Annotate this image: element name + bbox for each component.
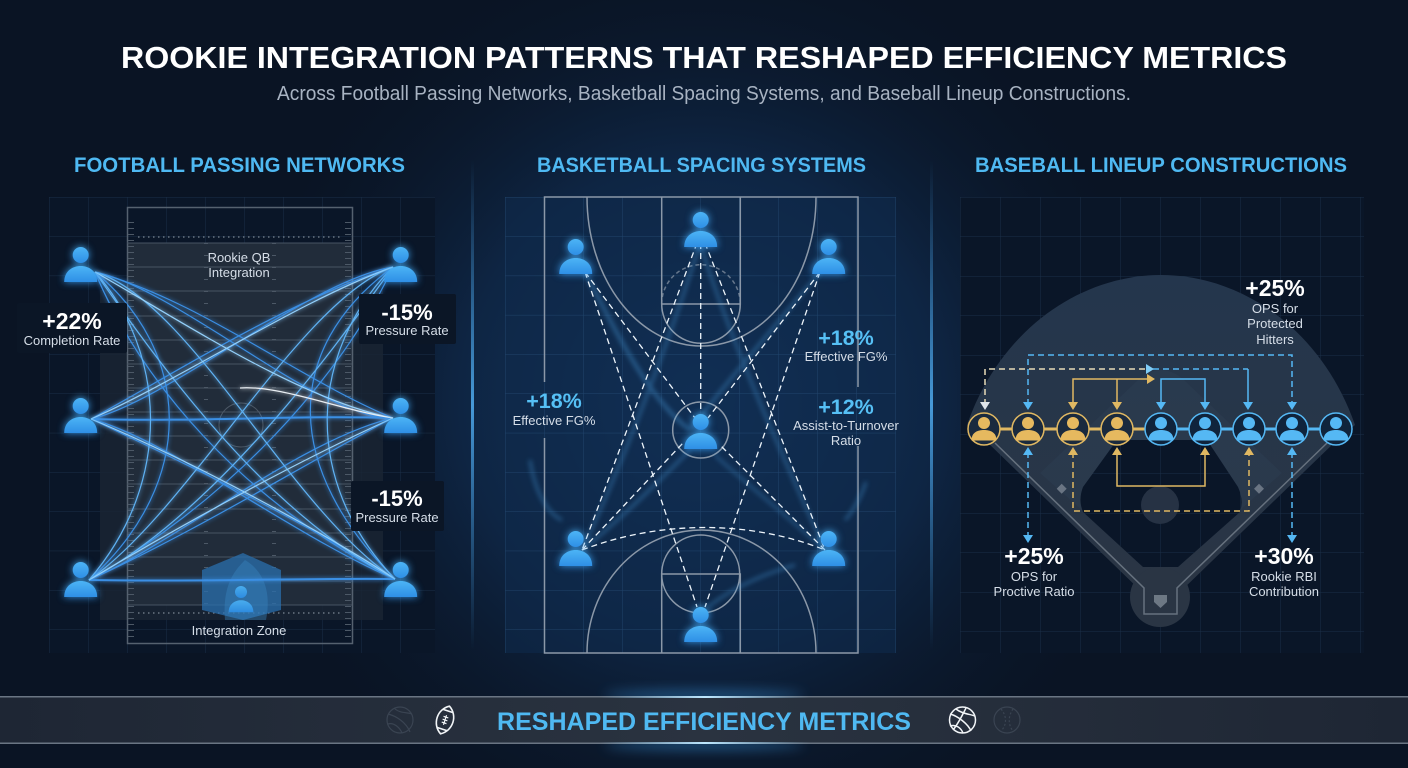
stat: assist to turnover: Ratio: [831, 433, 861, 448]
label: rookie QB integration: Rookie QB: [208, 250, 270, 265]
stat: OPS protected hitters: +25%: [1245, 275, 1305, 301]
panel background grid: [960, 197, 1364, 653]
panel: basketball spacing systems: [505, 154, 900, 653]
stat: OPS proctive ratio: Proctive Ratio: [994, 584, 1074, 599]
icon: basketball: [950, 707, 976, 733]
stat: OPS protected hitters: OPS for: [1252, 301, 1299, 316]
players: football: [64, 247, 417, 597]
stat: OPS protected hitters: Protected: [1247, 316, 1303, 331]
stat: effective FG right: Effective FG%: [805, 349, 888, 364]
label: rookie QB integration: Integration: [208, 265, 270, 280]
panel background grid: [505, 197, 896, 653]
glow streaks: [530, 243, 866, 607]
football field: [100, 208, 383, 644]
connector line: [984, 428, 1336, 430]
title: ROOKIE INTEGRATION PATTERNS THAT RESHAPED EFFICIENCY METRICS: [121, 40, 1287, 75]
stat: rookie RBI contribution: Rookie RBI: [1251, 569, 1317, 584]
heading: baseball: BASEBALL LINEUP CONSTRUCTIONS: [975, 154, 1347, 177]
heading: football: FOOTBALL PASSING NETWORKS: [74, 154, 405, 177]
callout: pressure rate upper: -15%: [381, 300, 433, 325]
arrowheads: [980, 364, 1297, 543]
stat: assist to turnover: [793, 395, 900, 448]
label: rookie QB integration: [208, 250, 270, 280]
stat: rookie RBI contribution: [1249, 543, 1319, 599]
icon: faint baseball right: [994, 707, 1020, 733]
stat: OPS protected hitters: Hitters: [1256, 332, 1294, 347]
callout: completion rate: Completion Rate: [24, 333, 120, 348]
stat: assist to turnover: +12%: [818, 395, 874, 419]
heading: basketball: BASKETBALL SPACING SYSTEMS: [537, 154, 866, 177]
lineup nodes: gold: [968, 413, 1133, 445]
stat: OPS proctive ratio: +25%: [1004, 543, 1064, 569]
stat: effective FG right: [805, 326, 888, 364]
stat: effective FG right: +18%: [818, 326, 874, 350]
stat: OPS proctive ratio: [994, 543, 1074, 599]
basketball court: [544, 197, 858, 653]
icon: faint basketball left: [387, 707, 413, 733]
banner text: RESHAPED EFFICIENCY METRICS: [497, 708, 911, 736]
lineup nodes: blue: [1145, 413, 1352, 445]
stat: effective FG left: [513, 389, 596, 428]
callout: completion rate: +22%: [42, 308, 102, 334]
label: integration zone: Integration Zone: [192, 623, 286, 638]
divider right: [930, 160, 933, 650]
callout: pressure rate upper: [359, 294, 456, 344]
callout: pressure rate lower: -15%: [371, 486, 423, 511]
stat: rookie RBI contribution: Contribution: [1249, 584, 1319, 599]
callout: pressure rate lower: [351, 481, 444, 531]
stat: OPS protected hitters: [1245, 275, 1305, 347]
panel background grid: [49, 197, 435, 653]
panel: baseball lineup constructions: [960, 154, 1364, 653]
callout: completion rate: [17, 303, 127, 353]
stat: OPS proctive ratio: OPS for: [1011, 569, 1058, 584]
stat: rookie RBI contribution: +30%: [1254, 543, 1314, 569]
divider left: [471, 160, 474, 650]
stat: assist to turnover: Assist-to-Turnover: [793, 418, 900, 433]
players: basketball: [559, 212, 845, 642]
integration zone shape: [202, 553, 281, 620]
dashed passing routes: [582, 243, 825, 607]
baseball field: [967, 275, 1355, 627]
stat: effective FG left: +18%: [526, 389, 582, 413]
subtitle: Across Football Passing Networks, Basketball Spacing Systems, and Baseball Lineup Constructions.: [277, 83, 1131, 105]
lineup arrows: [985, 355, 1292, 538]
footer banner: [0, 690, 1408, 750]
passing network lines: [89, 267, 395, 581]
icon: football: [433, 704, 457, 736]
callout: pressure rate lower: Pressure Rate: [355, 510, 439, 525]
stat: effective FG left: Effective FG%: [513, 413, 596, 428]
panel: football passing networks: [17, 154, 456, 653]
callout: pressure rate upper: Pressure Rate: [365, 323, 449, 338]
